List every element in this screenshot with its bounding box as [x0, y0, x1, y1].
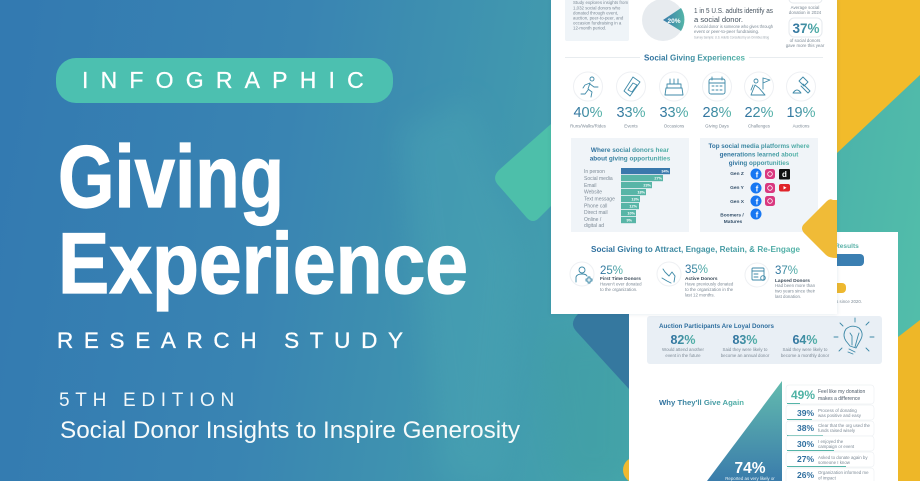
- panel: auction participants: [647, 316, 882, 364]
- icons: facebook: f: [756, 170, 759, 180]
- bar chart: 9%: [626, 218, 633, 222]
- stat: active donors: [657, 262, 734, 298]
- stat 37% gave more: gave more this year: [786, 43, 825, 48]
- stat 82%: [662, 333, 704, 358]
- experience: runs walks rides: [570, 72, 607, 128]
- reason card 27%: 27%: [797, 454, 814, 464]
- generation labels: Gen X: [730, 199, 745, 205]
- reason card 26%: of impact: [818, 476, 837, 480]
- study description box: 1,032 social donors who: [573, 6, 621, 10]
- experience: challenges: Challenges: [748, 124, 771, 128]
- bar chart: 18%: [637, 190, 646, 194]
- icons: facebook: f: [756, 184, 759, 194]
- experience: giving days: [702, 72, 732, 128]
- icons: facebook: f: [756, 210, 759, 220]
- stat 83%: [721, 333, 770, 358]
- reason card 27%: Asked to donate again by: [818, 455, 868, 460]
- yellow corner top right: [837, 0, 920, 153]
- social donor statement: Survey Sample: U.S. Adults Consulted by an Omnibus Blog: [694, 36, 769, 40]
- icon: light bulb: [834, 318, 874, 354]
- experience: challenges: [744, 72, 774, 128]
- icons: facebook: [750, 168, 762, 220]
- platforms heading: giving opportunities: [729, 160, 790, 167]
- bar chart: Social media: [584, 176, 613, 182]
- stat: lapsed donors: 37%: [775, 265, 798, 277]
- stat: active donors: Have previously donated: [685, 282, 734, 286]
- reason card 49%: [786, 385, 874, 404]
- reason card 38%: [786, 421, 874, 436]
- reason card 39%: 39%: [797, 408, 814, 418]
- bar chart: Email: [584, 183, 597, 189]
- triangle with 74% stat: Reported as very likely or: [725, 476, 775, 481]
- stat: lapsed donors: two years since their: [775, 288, 816, 294]
- platforms heading: [708, 143, 810, 167]
- experience: auctions: [786, 72, 816, 128]
- reason card 38%: Clear that the org used the: [818, 423, 871, 428]
- stat 83%: become an annual donor: [721, 353, 770, 358]
- bar chart: Website: [584, 190, 602, 196]
- social donor statement: [694, 6, 773, 40]
- heading: social giving experiences: Social Giving Experiences: [644, 52, 745, 62]
- tagline: Social Donor Insights to Inspire Generosity: [60, 417, 520, 444]
- reason card 39%: Process of donating: [818, 408, 857, 413]
- social donor statement: A social donor is someone who gives through: [694, 24, 773, 29]
- stat 82%: 82%: [670, 333, 696, 347]
- icons: facebook: f: [756, 198, 759, 206]
- teal diamond: [495, 124, 551, 221]
- reason card 30%: campaign or event: [818, 444, 855, 449]
- stat: active donors: last 12 months.: [685, 292, 715, 298]
- experience: occasions: 33%: [659, 105, 689, 121]
- stat 64%: [781, 333, 830, 358]
- stat 37% gave more: of social donors: [790, 38, 821, 43]
- stat 64%: 64%: [792, 333, 818, 347]
- chart heading: [590, 147, 671, 162]
- experience: runs walks rides: Runs/Walks/Rides: [570, 124, 607, 128]
- results note: donors since 2020.: [825, 299, 862, 304]
- stat: first time donors: First Time Donors: [600, 276, 641, 282]
- stat 37% gave more: [786, 18, 825, 48]
- experience: events: 33%: [616, 105, 646, 121]
- pie chart 20%: [642, 0, 684, 41]
- reason card 30%: I enjoyed the: [818, 439, 844, 444]
- study description box: Study explores insights from: [573, 0, 628, 5]
- stat 83%: 83%: [732, 333, 758, 347]
- stat: lapsed donors: Had been more than: [775, 283, 816, 288]
- panel: top social media platforms: [700, 138, 818, 232]
- stat: active donors: Active Donors: [685, 276, 718, 282]
- yellow results bar: [800, 283, 846, 293]
- icons: instagram: [765, 169, 775, 206]
- experience: auctions: 19%: [786, 105, 816, 121]
- study description box: donated through event,: [573, 10, 618, 16]
- average donation stat: [789, 0, 822, 15]
- stat: active donors: to the organization in the: [685, 287, 734, 292]
- reason card 26%: [786, 468, 874, 481]
- stat: lapsed donors: [745, 263, 816, 299]
- social donor statement: a social donor.: [694, 15, 743, 24]
- generation labels: [720, 171, 745, 225]
- platforms heading: Top social media platforms where: [708, 143, 810, 150]
- reason card 38%: funds raised wisely: [818, 428, 856, 433]
- study description box: 12-month period.: [573, 26, 606, 30]
- stat 82%: Would attend another: [662, 347, 704, 352]
- bar chart: In person: [584, 169, 605, 175]
- stat: lapsed donors: Lapsed Donors: [775, 278, 810, 284]
- bar chart: 13%: [631, 198, 640, 202]
- stat 64%: become a monthly donor: [781, 353, 830, 358]
- bar chart: 10%: [627, 212, 636, 216]
- chart heading: Where social donors hear: [591, 147, 670, 154]
- bar chart: Direct mail: [584, 210, 608, 216]
- average donation stat: donation in 2024: [789, 10, 822, 15]
- stat: first time donors: to the organization.: [600, 287, 637, 292]
- subtitle: research study: RESEARCH STUDY: [57, 328, 414, 353]
- triangle with 74% stat: 74%: [734, 460, 766, 477]
- icon: youtube: [779, 184, 790, 192]
- bar chart: 27%: [654, 176, 663, 180]
- pie chart 20%: 20%: [667, 18, 681, 25]
- generation labels: Gen Z: [730, 171, 744, 177]
- heading: why they'll give again: Why They'll Give Again: [659, 398, 744, 407]
- experience: events: [616, 72, 646, 128]
- yellow diamond accent: [802, 199, 837, 258]
- average donation stat: Average social: [791, 5, 819, 10]
- reason card 49%: Feel like my donation: [818, 389, 865, 395]
- generation labels: Matures: [724, 219, 743, 225]
- bar chart: 12%: [629, 204, 638, 208]
- social donor statement: 1 in 5 U.S. adults identify as: [694, 6, 773, 15]
- results heading fragment: Results: [835, 243, 859, 250]
- reason card 39%: was positive and easy: [818, 413, 862, 418]
- bar chart: 23%: [643, 184, 652, 188]
- panel: main infographic sheet: [551, 0, 837, 314]
- chart heading: about giving opportunities: [590, 156, 671, 162]
- reason card 26%: 26%: [797, 470, 814, 480]
- social donor statement: event or peer-to-peer fundraising.: [694, 29, 759, 34]
- experience: challenges: 22%: [744, 105, 774, 121]
- reason card 30%: [786, 436, 874, 451]
- bar chart: Text message: [584, 196, 615, 202]
- experience: occasions: [659, 72, 689, 128]
- panel: title block: [56, 58, 520, 444]
- bar chart: Phone call: [584, 204, 607, 210]
- generation labels: Boomers /: [720, 212, 744, 218]
- study description box: [565, 0, 629, 41]
- bar chart: digital ad: [584, 223, 604, 229]
- reason card 49%: 49%: [791, 388, 815, 402]
- reason card 39%: [786, 405, 874, 420]
- heading: attract engage retain re-engage: Social Giving to Attract, Engage, Retain, & Re-Engage: [591, 244, 800, 254]
- reason card 27%: [786, 452, 874, 467]
- experience: giving days: Giving Days: [705, 124, 730, 128]
- stat: first time donors: 25%: [600, 265, 623, 277]
- stat 83%: Said they were likely to: [723, 347, 768, 352]
- infographic pill: INFOGRAPHIC: [82, 67, 376, 93]
- reason card 26%: Organization informed me: [818, 470, 869, 475]
- experience: occasions: Occasions: [664, 124, 685, 128]
- bar chart: [584, 168, 670, 229]
- edition: 5TH EDITION: [59, 390, 240, 411]
- auction heading: Auction Participants Are Loyal Donors: [659, 323, 774, 330]
- panel: where social donors hear: [571, 138, 689, 232]
- stat: first time donors: [570, 262, 642, 292]
- panel: second infographic sheet: [629, 232, 898, 481]
- background photo texture: [400, 100, 630, 481]
- blue results bar: [800, 254, 864, 266]
- experience: runs walks rides: 40%: [573, 105, 603, 121]
- reason card 27%: someone I know: [818, 460, 851, 465]
- platforms heading: generations learned about: [720, 152, 799, 158]
- yellow circle behind second sheet: [623, 457, 649, 481]
- bar chart: Online /: [584, 217, 602, 223]
- yellow corner bottom right: [898, 320, 920, 481]
- reason card 30%: 30%: [797, 439, 814, 449]
- reason card 49%: makes a difference: [818, 396, 860, 402]
- experience: events: Events: [624, 124, 639, 128]
- stat 37% gave more: 37%: [792, 21, 820, 36]
- infographic pill: [56, 58, 393, 103]
- study description box: auction, peer-to-peer, and: [573, 16, 624, 20]
- stat: active donors: 35%: [685, 264, 708, 276]
- title: experience: Experience: [58, 216, 468, 312]
- icon: tiktok: d: [782, 170, 787, 179]
- experience: giving days: 28%: [702, 105, 732, 121]
- study description box: occasion fundraising in a: [573, 20, 622, 26]
- blue diamond: [573, 314, 629, 389]
- triangle with 74% stat: [707, 381, 782, 481]
- stat 64%: Said they were likely to: [783, 347, 828, 352]
- bar chart: 34%: [661, 170, 670, 174]
- generation labels: Gen Y: [730, 185, 745, 191]
- reason card 38%: 38%: [797, 423, 814, 433]
- stat: lapsed donors: last donation.: [775, 294, 801, 299]
- experience: auctions: Auctions: [793, 124, 810, 128]
- title: giving: Giving: [58, 127, 284, 226]
- stat: first time donors: Haven't ever donated: [600, 282, 642, 286]
- stat 82%: event in the future: [665, 353, 701, 358]
